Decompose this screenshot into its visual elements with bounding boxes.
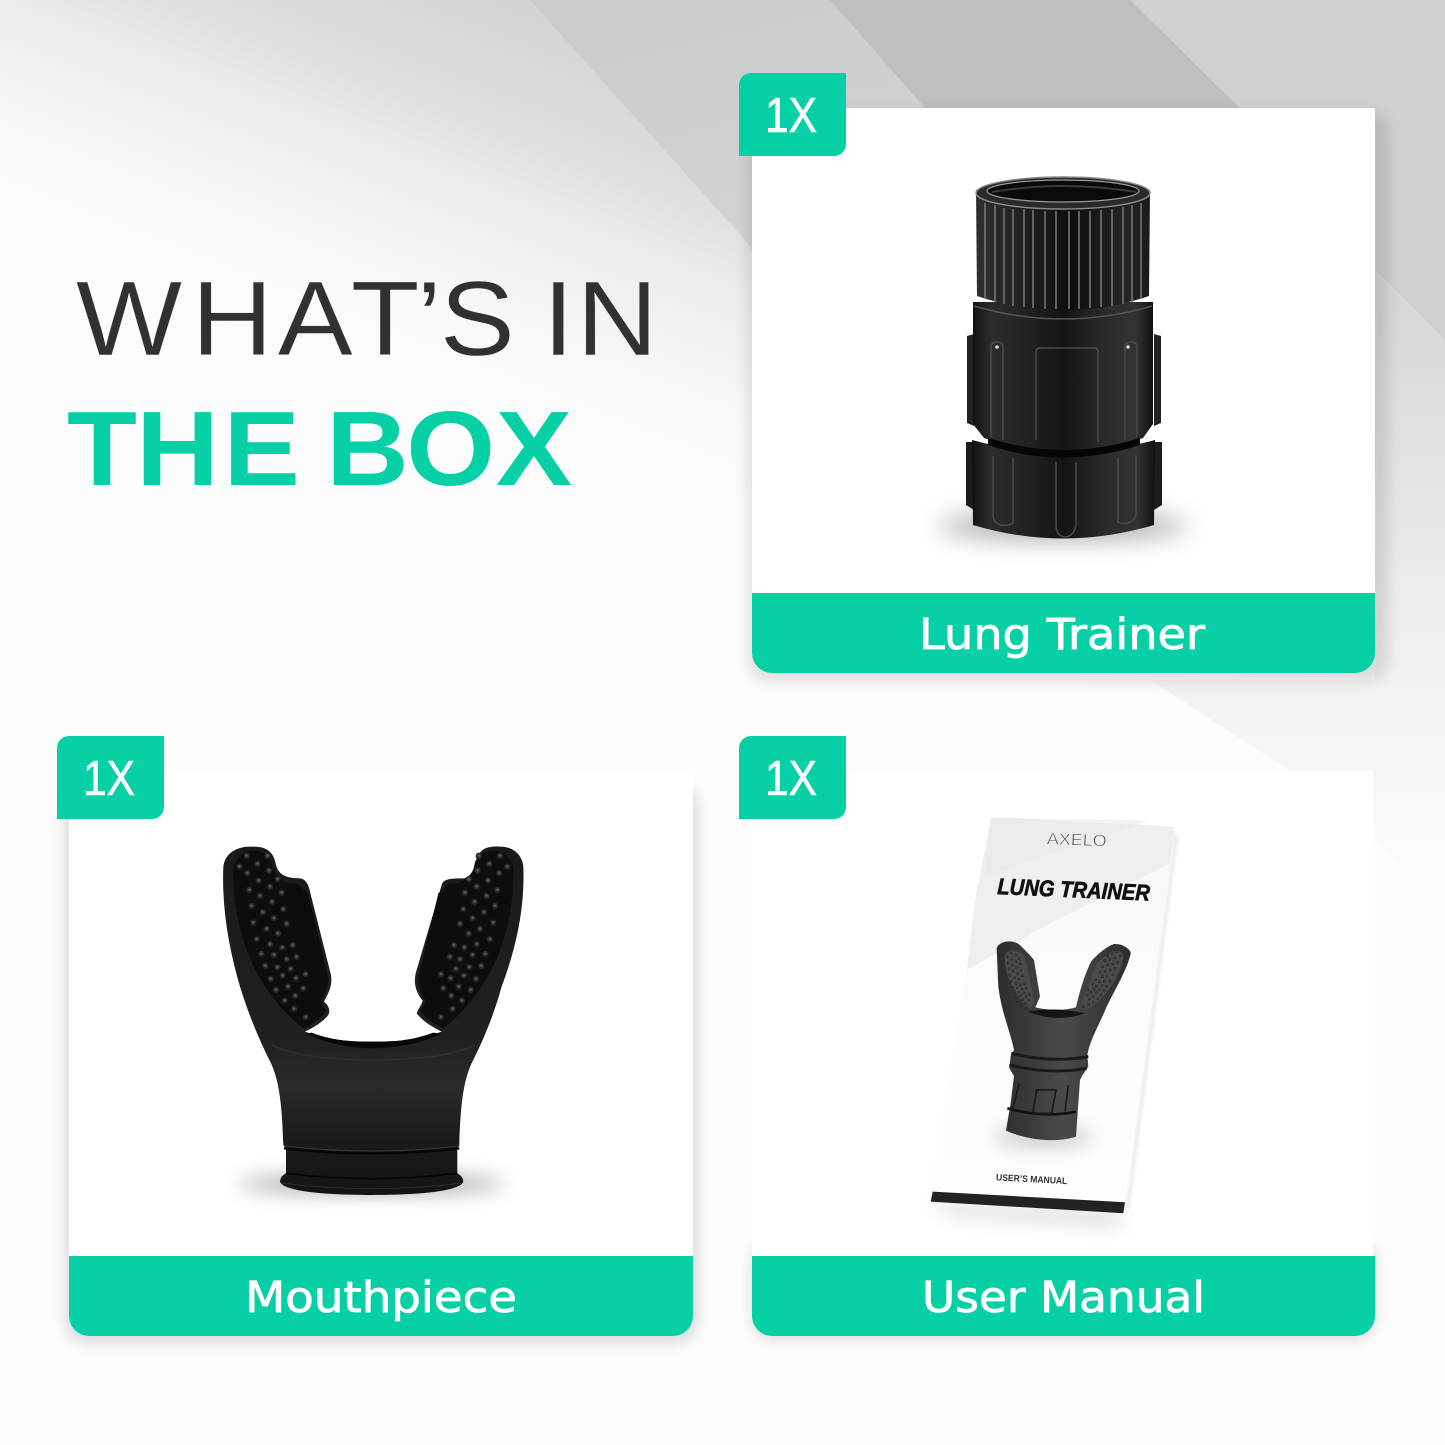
booklet shadow xyxy=(931,1205,1125,1223)
inner recess top lip xyxy=(307,1033,442,1048)
product: lung trainer xyxy=(938,177,1188,538)
card body xyxy=(752,108,1375,673)
mini dots xyxy=(1003,949,1031,1012)
panel: lung trainer xyxy=(739,73,1388,682)
product: manual booklet xyxy=(931,817,1178,1223)
card body xyxy=(752,771,1373,1336)
teeth grip dots: left xyxy=(236,853,309,1021)
booklet page xyxy=(931,817,1175,1203)
product: mouthpiece xyxy=(223,847,524,1195)
label: Mouthpiece: Mouthpiece xyxy=(245,1273,517,1323)
booklet product image xyxy=(993,941,1131,1143)
card body xyxy=(69,771,693,1336)
quantity badge xyxy=(57,736,164,819)
silicone body xyxy=(223,847,524,1195)
heading line: THE BOX: THE BOX xyxy=(67,390,572,508)
top ribbed nut xyxy=(976,178,1150,310)
quantity badge: 1X xyxy=(765,89,817,143)
label bar xyxy=(69,1256,693,1336)
inner pads xyxy=(233,851,328,1028)
rings xyxy=(284,1148,459,1153)
card shadow xyxy=(748,112,1388,682)
label bar xyxy=(752,593,1375,673)
quantity badge: 1X xyxy=(765,752,817,806)
lower tabs xyxy=(966,442,1162,510)
brand: AXELO: AXELO xyxy=(1046,829,1107,850)
bottom strip xyxy=(931,1192,1125,1213)
panel: mouthpiece xyxy=(57,736,697,1343)
teeth grip dots: right xyxy=(438,853,511,1021)
quantity badge xyxy=(739,73,846,156)
booklet title: LUNG TRAINER xyxy=(997,873,1151,906)
lower nut xyxy=(972,440,1155,538)
quantity badge xyxy=(739,736,846,819)
rib details xyxy=(991,342,1137,537)
label: User Manual: User Manual xyxy=(922,1273,1205,1323)
middle body xyxy=(973,302,1153,452)
label: Lung Trainer: Lung Trainer xyxy=(919,610,1205,660)
gap between body and lower nut xyxy=(988,438,1140,458)
booklet footer text: USER’S MANUAL xyxy=(996,1172,1068,1186)
heading line: WHAT'S IN: WHAT’S IN xyxy=(76,260,658,378)
card shadow xyxy=(65,783,697,1343)
card shadow xyxy=(752,1240,1375,1339)
label bar xyxy=(752,1256,1375,1336)
middle tabs xyxy=(967,334,1161,426)
panel: user manual xyxy=(739,736,1375,1339)
quantity badge: 1X xyxy=(83,752,135,806)
heading xyxy=(67,260,658,508)
top rim xyxy=(976,177,1150,209)
